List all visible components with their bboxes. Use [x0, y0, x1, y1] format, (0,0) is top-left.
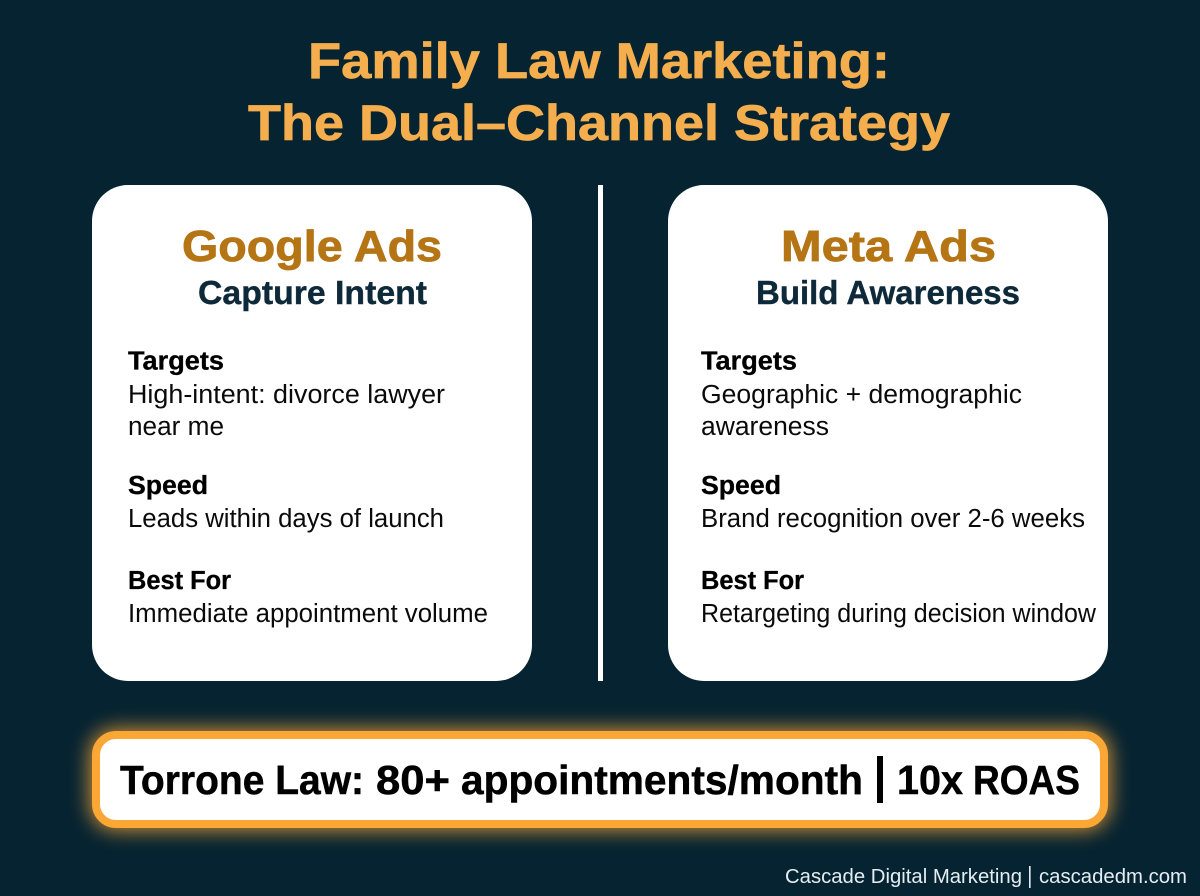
center divider — [598, 185, 603, 681]
footer credit: cascadedm.com — [1039, 865, 1187, 888]
Google best for: Immediate appointment volume — [128, 600, 488, 628]
Google targets: Targets — [128, 348, 224, 376]
Meta best for: Retargeting during decision window — [701, 600, 1097, 628]
Google speed: Leads within days of launch — [128, 505, 444, 533]
Google targets — [128, 348, 446, 441]
Meta targets: Targets — [701, 348, 797, 376]
callout: results banner: 80+ — [376, 757, 450, 803]
Meta speed: Brand recognition over 2-6 weeks — [701, 505, 1085, 533]
callout: results banner: ROAS — [973, 757, 1080, 803]
title — [248, 33, 950, 151]
Google targets: near me — [128, 413, 224, 441]
title: The Dual–Channel Strategy — [248, 95, 950, 151]
footer credit — [785, 865, 1187, 888]
Meta targets — [701, 348, 1022, 441]
panel: Google Ads — [92, 185, 532, 681]
Google targets: High-intent: divorce lawyer — [128, 381, 446, 409]
Google speed: Speed — [128, 472, 208, 500]
Meta speed: Speed — [701, 472, 781, 500]
Meta best for: Best For — [701, 567, 804, 595]
Meta Ads subheading: Build Awareness — [756, 274, 1020, 311]
Google Ads subheading: Capture Intent — [198, 274, 427, 311]
footer credit: Cascade Digital Marketing — [785, 865, 1022, 888]
callout: results banner: appointments/month — [461, 757, 863, 803]
Meta speed — [701, 472, 1085, 533]
Google best for — [128, 567, 488, 628]
Google best for: Best For — [128, 567, 231, 595]
callout: results banner — [90, 729, 1110, 830]
Google Ads heading: Google Ads — [182, 222, 442, 271]
title: Family Law Marketing: — [308, 33, 890, 89]
Meta targets: awareness — [701, 413, 829, 441]
callout: results banner: 10x — [897, 757, 963, 803]
callout: results banner: Torrone Law: — [120, 757, 364, 803]
Meta best for — [701, 567, 1097, 628]
Google speed — [128, 472, 444, 533]
Meta Ads heading: Meta Ads — [781, 222, 996, 271]
Meta targets: Geographic + demographic — [701, 381, 1022, 409]
panel: Meta Ads — [668, 185, 1108, 681]
